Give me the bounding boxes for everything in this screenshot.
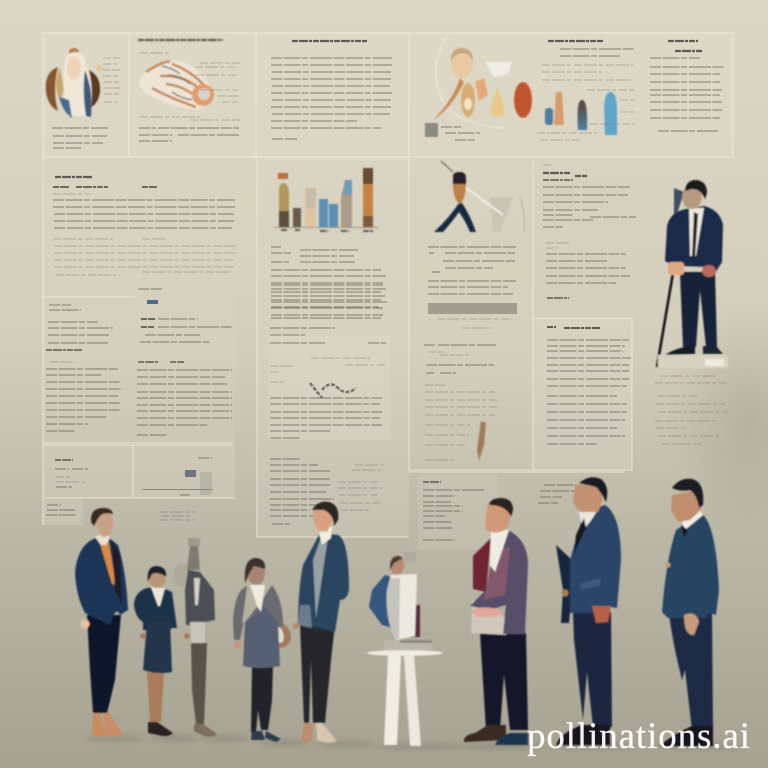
- icon: left blue strip: [59, 97, 72, 118]
- book stripe: [400, 640, 432, 643]
- paper shade: [387, 578, 400, 640]
- white paper: [387, 574, 417, 640]
- panel: column text: [543, 165, 636, 298]
- base line: [142, 488, 213, 490]
- panel: arrow figure illustration: [434, 161, 524, 232]
- neck and face: [96, 511, 113, 537]
- icon: gradient figure: [578, 100, 587, 130]
- panel: small note: [538, 485, 576, 503]
- icon: wing strokes: [146, 62, 207, 107]
- body: [137, 370, 232, 435]
- chip label: [141, 319, 155, 327]
- hair: [312, 502, 338, 526]
- icon: orange figure: [554, 92, 564, 125]
- maroon scarf: [473, 538, 491, 592]
- figure: man in navy jacket and orange tie: [75, 508, 128, 736]
- body: [543, 187, 636, 227]
- shoes: [660, 726, 713, 746]
- chart tag: [278, 173, 288, 179]
- icon: right blue strip: [84, 70, 91, 117]
- bar 2: [293, 208, 301, 227]
- icon: grey block: [425, 123, 438, 137]
- icon: legs: [434, 203, 476, 232]
- legs: [573, 612, 612, 727]
- hair: [672, 479, 703, 508]
- lines: [423, 490, 485, 540]
- arrow panel text: [428, 247, 517, 328]
- lower block lines: [546, 254, 630, 283]
- chart axis: [274, 226, 378, 228]
- icon: left brown wing: [46, 67, 58, 111]
- scarf: [151, 587, 165, 606]
- hair: [148, 566, 166, 582]
- top lines: [140, 319, 232, 342]
- icon: blue figure: [545, 108, 553, 125]
- dense grey block: [428, 303, 517, 314]
- icon: wing shape: [139, 60, 211, 110]
- right hand: [702, 265, 716, 277]
- lines: [55, 469, 88, 487]
- right column text: [650, 58, 725, 131]
- jacket: [369, 575, 400, 630]
- jacket: [662, 514, 719, 618]
- heading: [547, 327, 600, 328]
- icon: face: [451, 48, 473, 78]
- icon: pedestal mark: [705, 359, 724, 366]
- hand: [234, 641, 242, 649]
- chart text: [271, 247, 387, 315]
- hand: [184, 633, 190, 639]
- skirt: [143, 622, 172, 673]
- panel: small box right chart: [142, 458, 213, 495]
- legs: [251, 666, 273, 733]
- brown shoe: [464, 725, 506, 742]
- white apron: [471, 600, 506, 635]
- wing faint lines: [140, 53, 240, 120]
- collar: [319, 526, 332, 545]
- body text lower: [53, 239, 236, 275]
- body text: [50, 361, 76, 363]
- body: [426, 365, 494, 373]
- bar 6 top: [343, 180, 352, 195]
- icon: note: [485, 62, 512, 77]
- panel: right of left column text: [137, 289, 232, 435]
- hand: [140, 633, 146, 639]
- jacket: [298, 533, 349, 632]
- icon: left strip: [56, 68, 64, 100]
- hair: [579, 477, 607, 502]
- white stripe: [194, 578, 200, 605]
- icon: peach chest: [67, 56, 81, 80]
- jacket: [570, 505, 621, 613]
- pocket: [580, 578, 601, 590]
- small heading: [49, 305, 81, 310]
- more body: [425, 385, 497, 460]
- body: [547, 340, 631, 444]
- shirt: [578, 502, 603, 530]
- hair: [390, 556, 403, 570]
- torso: [233, 585, 283, 640]
- books: [384, 640, 432, 651]
- panel: lower middle text: [423, 482, 485, 540]
- heading bold: [543, 173, 587, 176]
- small hand: [562, 590, 568, 596]
- head: [390, 555, 404, 575]
- panel: centre column text: [270, 285, 386, 438]
- grey bar: [200, 472, 212, 495]
- bow: [681, 525, 688, 538]
- heading: [138, 39, 223, 41]
- tag: [180, 458, 212, 495]
- icon: hand: [475, 78, 488, 101]
- legs: [480, 633, 528, 730]
- lines: [428, 247, 516, 294]
- torso: [185, 570, 215, 643]
- subhead lines: [48, 322, 113, 343]
- shirt: [490, 530, 509, 572]
- heading: [292, 40, 367, 42]
- bold label: [46, 349, 82, 351]
- face: [682, 185, 702, 209]
- shirt and tie: [98, 537, 116, 585]
- left foot: [301, 723, 313, 742]
- bar 5: [329, 204, 338, 227]
- figure: tall person in blue jacket: [293, 502, 349, 743]
- icon: hair: [451, 48, 473, 62]
- icon: central body: [63, 52, 90, 116]
- tabletop: [367, 650, 443, 656]
- icon: tall blue figure: [604, 92, 617, 135]
- icon: wing dark strokes: [162, 66, 192, 100]
- tag: [404, 552, 416, 562]
- bar 6: [341, 180, 352, 227]
- right shoe: [703, 346, 723, 354]
- flag: [674, 188, 684, 214]
- right column heading: [668, 41, 703, 51]
- icon: small knife: [477, 421, 486, 461]
- right leg: [404, 655, 421, 746]
- legs: [300, 625, 335, 723]
- body lines: [46, 369, 122, 431]
- hand: [293, 623, 299, 629]
- jacket: [75, 537, 128, 625]
- caption under illustration: [441, 127, 480, 140]
- shirt: [689, 208, 704, 256]
- maroon piece: [410, 605, 420, 637]
- left shoe: [92, 713, 106, 736]
- icon: head: [69, 48, 79, 56]
- heading: [424, 344, 496, 346]
- blue shoe: [495, 733, 528, 745]
- subheading: [560, 49, 634, 56]
- stick: [657, 273, 673, 367]
- round object: [276, 620, 291, 648]
- left leg: [384, 655, 401, 745]
- hair: [489, 498, 513, 517]
- icon: bulb core: [198, 88, 210, 100]
- panel: pedestal caption: [655, 376, 728, 444]
- blue chip: [147, 300, 158, 304]
- heading: [543, 164, 553, 166]
- right foot: [316, 723, 337, 743]
- white beam: [465, 187, 503, 215]
- wing caption: [139, 128, 239, 141]
- head block: [188, 538, 200, 546]
- table: [367, 650, 443, 746]
- bar 1 base: [279, 211, 289, 227]
- shoes: [251, 731, 281, 742]
- panel: lower centre text: [270, 459, 385, 524]
- top right panel text: [441, 41, 725, 140]
- icon: tan oval: [461, 83, 475, 117]
- bar 3 top: [306, 188, 316, 208]
- floor shadows: [85, 735, 745, 749]
- jacket: [665, 206, 723, 278]
- heading: [423, 481, 441, 483]
- icon: inner oval: [464, 98, 472, 110]
- panel: left middle text: [53, 177, 236, 275]
- legs: [87, 615, 121, 713]
- faint: [56, 477, 86, 482]
- lower arrow panel text: [424, 345, 497, 460]
- face: [313, 506, 332, 532]
- face: [485, 505, 511, 532]
- heading: [55, 176, 93, 178]
- anatomy caption: [52, 128, 108, 148]
- inner panel: [313, 535, 328, 618]
- figure: person behind table: [369, 552, 432, 651]
- face: [573, 482, 603, 512]
- centre lines: [537, 65, 635, 140]
- folder: [556, 545, 572, 623]
- tie: [692, 212, 698, 258]
- jacket: [470, 530, 528, 634]
- blur shadow: [174, 563, 190, 587]
- small hand: [666, 562, 670, 568]
- inner round object: [275, 623, 284, 644]
- small sketch: [310, 383, 356, 398]
- subheading: [428, 352, 472, 355]
- icon: orange arm: [433, 78, 464, 120]
- heading: [548, 40, 603, 42]
- panel: small box left: [55, 460, 88, 487]
- icon: head: [453, 172, 466, 184]
- face: [671, 490, 701, 522]
- shirt collar: [95, 533, 110, 545]
- hair: [685, 180, 707, 199]
- panel: top right illustration: [425, 34, 617, 137]
- icon: red oval: [514, 82, 532, 118]
- figure: woman in grey: [233, 558, 291, 742]
- wing labels: [195, 63, 240, 102]
- lines: [270, 459, 334, 524]
- bar 7 base: [363, 216, 373, 227]
- panel: tiny note right: [160, 512, 196, 520]
- subheads: [53, 186, 157, 188]
- sub: [543, 179, 573, 181]
- icon: yellow shape: [490, 88, 504, 117]
- figure: man with folder: [556, 477, 621, 745]
- text: [270, 381, 284, 383]
- side column: [338, 465, 385, 510]
- body text: [271, 58, 392, 139]
- chart tick labels: [281, 230, 373, 231]
- tag: [547, 297, 569, 299]
- hair: [91, 508, 113, 526]
- panel: left column text: [46, 305, 122, 431]
- hands: [471, 607, 502, 617]
- band: [270, 328, 386, 343]
- hair: [245, 558, 265, 583]
- figure: grey statuette: [174, 538, 217, 737]
- face: [247, 561, 265, 585]
- shirt: [190, 622, 205, 643]
- panel: top centre text: [271, 41, 392, 139]
- panel outlines: [43, 33, 733, 537]
- blouse: [250, 585, 265, 612]
- figure: woman in dark dress: [134, 566, 177, 736]
- upper lines: [271, 285, 383, 318]
- title: [55, 459, 73, 461]
- subheading lines: [53, 193, 91, 195]
- hand: [80, 620, 90, 628]
- right shoe: [103, 713, 123, 736]
- panel: bar chart: [274, 168, 378, 231]
- left shoe: [665, 345, 695, 355]
- lower lines: [437, 319, 512, 328]
- neck: [187, 546, 200, 570]
- shoes: [556, 725, 610, 745]
- panel surfaces: [43, 33, 733, 550]
- panel: tiny note: [46, 505, 76, 515]
- watermark: pollinations.ai: [527, 716, 750, 757]
- figure: man in purple jacket: [464, 498, 528, 745]
- anatomy labels: [102, 58, 120, 102]
- pink waistcoat: [484, 545, 510, 600]
- panel: wing illustration: [138, 40, 223, 110]
- icon: grey triangle: [490, 197, 513, 232]
- hand: [592, 606, 611, 623]
- subheading: [138, 361, 184, 363]
- body text: [53, 200, 235, 228]
- tie: [574, 518, 586, 553]
- legs: [669, 613, 713, 730]
- shoe: [194, 724, 217, 737]
- background shade: [500, 180, 768, 580]
- apron: [243, 604, 280, 668]
- hand: [684, 614, 699, 635]
- icon: accent dot: [96, 65, 102, 71]
- folder: [298, 605, 312, 628]
- faint circle: [436, 34, 505, 128]
- legs: [680, 272, 717, 347]
- blue chip: [185, 470, 196, 477]
- icon: orange torso: [453, 183, 466, 204]
- icon: orange bulb: [192, 84, 214, 106]
- face: [149, 570, 165, 588]
- panel: anatomy illustration: [46, 48, 102, 118]
- top: [134, 587, 177, 630]
- figure: man at right: [660, 479, 719, 746]
- heading: [138, 288, 162, 290]
- paragraph: [270, 398, 382, 438]
- waistcoat: [112, 540, 122, 605]
- shirt: [682, 510, 703, 530]
- bar 1: [279, 183, 289, 227]
- left hand: [668, 262, 684, 275]
- pedestal: [658, 355, 728, 368]
- bar 3: [305, 188, 316, 227]
- legs: [147, 672, 164, 722]
- lines: [270, 358, 385, 372]
- icon: right curve: [520, 197, 524, 232]
- bar 7: [363, 168, 373, 227]
- bar 7 top: [363, 168, 373, 184]
- figure: man with stick: [657, 180, 728, 368]
- pointer line: [441, 161, 453, 172]
- panel: light box text: [547, 327, 631, 444]
- leg: [191, 643, 207, 724]
- icon: right brown wing: [89, 70, 100, 107]
- bar 4: [319, 199, 328, 227]
- lower block: [546, 243, 570, 248]
- shoe: [148, 722, 173, 736]
